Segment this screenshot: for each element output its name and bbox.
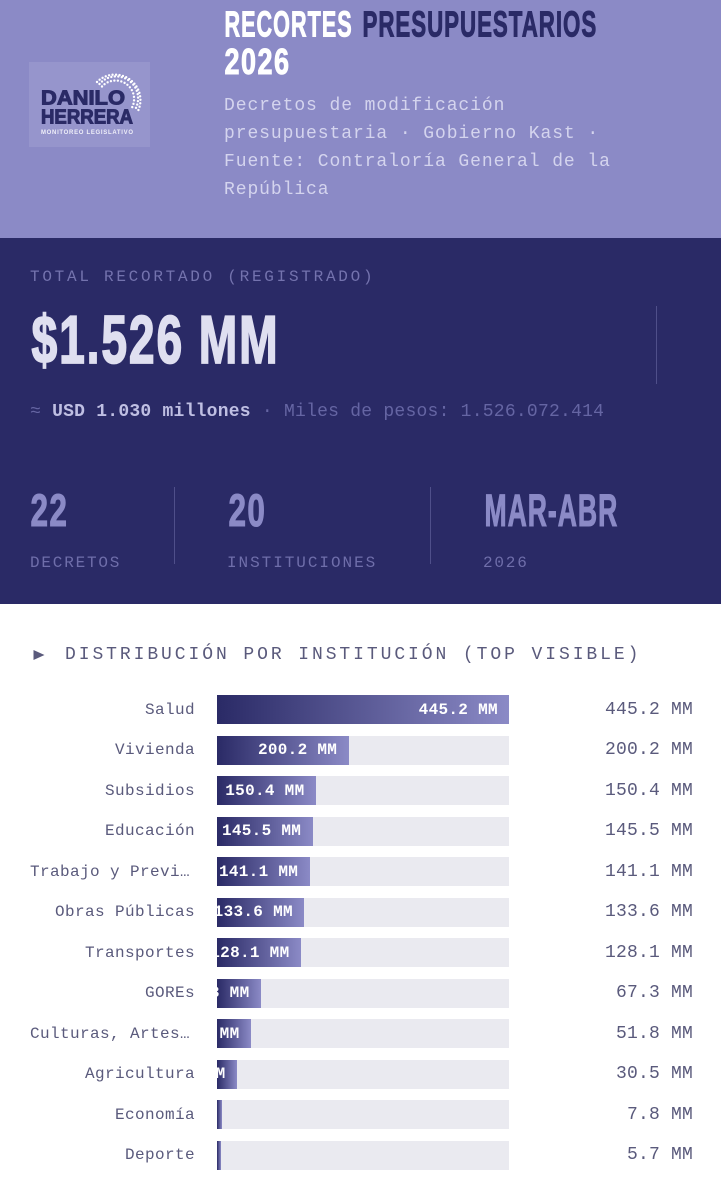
- row: GOREs: [145, 979, 693, 1008]
- row: Salud: Salud: [145, 700, 195, 718]
- logo: Danilo Herrera: DANILO: [41, 88, 125, 110]
- row: Vivienda: Vivienda: [115, 741, 195, 759]
- row: Salud: 445.2 MM: [419, 700, 498, 718]
- big number: $1.526 MM: [32, 302, 278, 378]
- row: Trabajo y Previsión: 141.1 MM: [219, 862, 298, 880]
- row: Deporte: 5.7 MM: [627, 1145, 693, 1165]
- title: RECORTES: [224, 5, 352, 45]
- subtitle: [224, 96, 611, 200]
- row: Agricultura: [85, 1060, 693, 1089]
- row: Vivienda: 200.2 MM: [258, 741, 337, 759]
- stat: periodo: [483, 488, 618, 572]
- row: Transportes: Transportes: [85, 944, 195, 962]
- subtitle: República: [224, 180, 330, 200]
- row: Educación: Educación: [105, 822, 195, 840]
- panel: total summary: [0, 238, 721, 604]
- divider: [430, 487, 431, 564]
- row: Salud: 445.2 MM: [605, 700, 693, 720]
- stat: decretos: [30, 488, 121, 572]
- icon: arrow: [34, 650, 44, 660]
- row: Culturas, Artes: 51.8 MM: [616, 1024, 693, 1044]
- row: Trabajo y Previsión: 141.1 MM: [605, 862, 693, 882]
- row: Economía: 7.8 MM: [627, 1104, 693, 1124]
- row: Economía: Economía: [115, 1106, 195, 1124]
- row: Economía: [115, 1100, 693, 1129]
- logo: Danilo Herrera: HERRERA: [41, 106, 133, 128]
- row: Agricultura: 30.5 MM: [616, 1064, 693, 1084]
- label: total recortado: TOTAL RECORTADO (REGISTRADO): [30, 268, 375, 286]
- row: Obras Públicas: Obras Públicas: [55, 903, 195, 921]
- row: GOREs: GOREs: [145, 984, 195, 1002]
- row: Agricultura: Agricultura: [85, 1065, 195, 1083]
- subtitle: Fuente: Contraloría General de la: [224, 152, 611, 172]
- panel: header: [0, 0, 721, 238]
- title: [224, 5, 596, 82]
- row: Deporte: Deporte: [125, 1146, 195, 1164]
- usd equivalence: ≈ USD 1.030 millones · Miles de pesos: 1.526.072.414: [30, 402, 604, 422]
- row: Vivienda: [115, 736, 693, 765]
- row: Subsidios: [105, 776, 693, 805]
- heading text: DISTRIBUCIÓN POR INSTITUCIÓN (TOP VISIBLE): [65, 645, 641, 665]
- row: Trabajo y Previsión: [30, 857, 693, 886]
- row: Vivienda: 200.2 MM: [605, 740, 693, 760]
- row: Obras Públicas: 133.6 MM: [605, 902, 693, 922]
- stat label: instituciones: INSTITUCIONES: [227, 554, 377, 572]
- stat label: 2026: 2026: [483, 554, 529, 572]
- stat: instituciones: [227, 488, 377, 572]
- row: Subsidios: 150.4 MM: [605, 780, 693, 800]
- row: Transportes: 128.1 MM: [605, 942, 693, 962]
- logo: Danilo Herrera: MONITOREO LEGISLATIVO: [41, 130, 133, 136]
- row: Transportes: [85, 938, 693, 967]
- row: Deporte: [125, 1141, 693, 1170]
- row: Educación: 145.5 MM: [222, 822, 301, 840]
- row: Subsidios: 150.4 MM: [225, 782, 304, 800]
- row: Culturas, Artes: Culturas, Artes…: [30, 1024, 190, 1042]
- subtitle: presupuestaria · Gobierno Kast ·: [224, 124, 599, 144]
- bar chart: [30, 695, 693, 1170]
- stat label: decretos: DECRETOS: [30, 554, 121, 572]
- row: GOREs: 67.3 MM: [616, 983, 693, 1003]
- title: 2026: [224, 41, 289, 82]
- divider: [174, 487, 175, 564]
- row: Culturas, Artes: [30, 1019, 693, 1048]
- section heading: [34, 643, 641, 665]
- logo: Danilo Herrera: [29, 62, 150, 147]
- row: Obras Públicas: [55, 898, 693, 927]
- row: Educación: [105, 817, 693, 846]
- row: Educación: 145.5 MM: [605, 821, 693, 841]
- row: Salud: [145, 695, 693, 724]
- title: PRESUPUESTARIOS: [362, 5, 596, 45]
- subtitle: Decretos de modificación: [224, 96, 505, 116]
- divider: [656, 306, 657, 384]
- row: Trabajo y Previsión: Trabajo y Previ…: [30, 862, 190, 880]
- row: Subsidios: Subsidios: [105, 782, 195, 800]
